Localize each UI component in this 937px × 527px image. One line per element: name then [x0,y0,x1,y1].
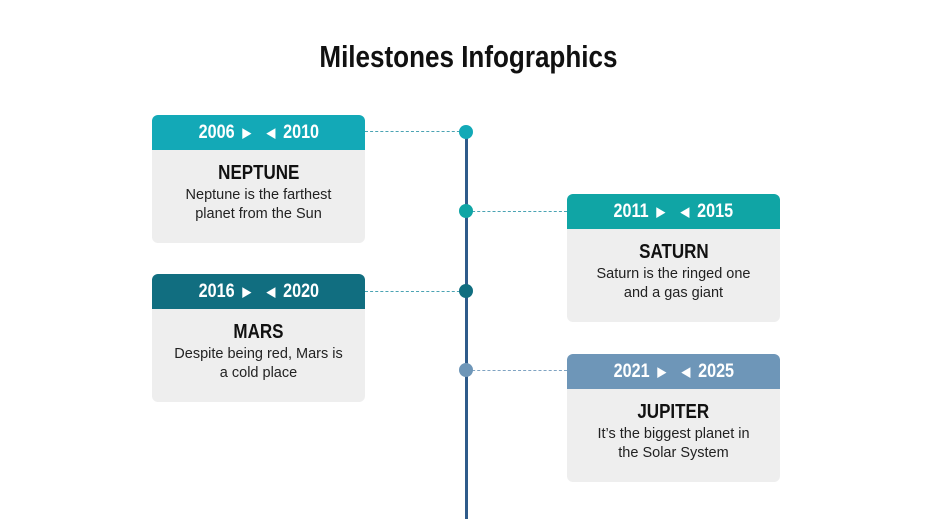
dot: jupiter [459,363,473,377]
dot: mars [459,284,473,298]
card: jupiter: 2021 ▶ ◀ 2025 [613,361,734,382]
dot: neptune [459,125,473,139]
title: Milestones Infographics [319,39,617,74]
card: saturn: 2011 ▶ ◀ 2015 [614,201,733,222]
card: jupiter: JUPITER [638,401,709,423]
card: mars: 2016 ▶ ◀ 2020 [198,281,319,302]
card: neptune: 2006 ▶ ◀ 2010 [198,122,319,143]
connector: jupiter [467,370,567,371]
card: saturn: SATURN [639,241,708,263]
dot: saturn [459,204,473,218]
card: mars [152,274,365,402]
connector: neptune [365,131,465,132]
card: neptune [152,115,365,243]
card: mars: Despite being red, Mars is a cold place [174,346,343,381]
card: jupiter: It’s the biggest planet in the Solar System [597,426,750,461]
card: saturn: Saturn is the ringed one and a gas giant [597,266,750,301]
card: saturn [567,194,780,322]
card: mars: MARS [233,321,284,343]
card: jupiter [567,354,780,482]
connector: saturn [467,211,567,212]
connector: mars [365,291,465,292]
card: neptune: NEPTUNE [218,162,299,184]
timeline axis [465,132,468,519]
card: neptune: Neptune is the farthest planet from the Sun [186,187,331,222]
